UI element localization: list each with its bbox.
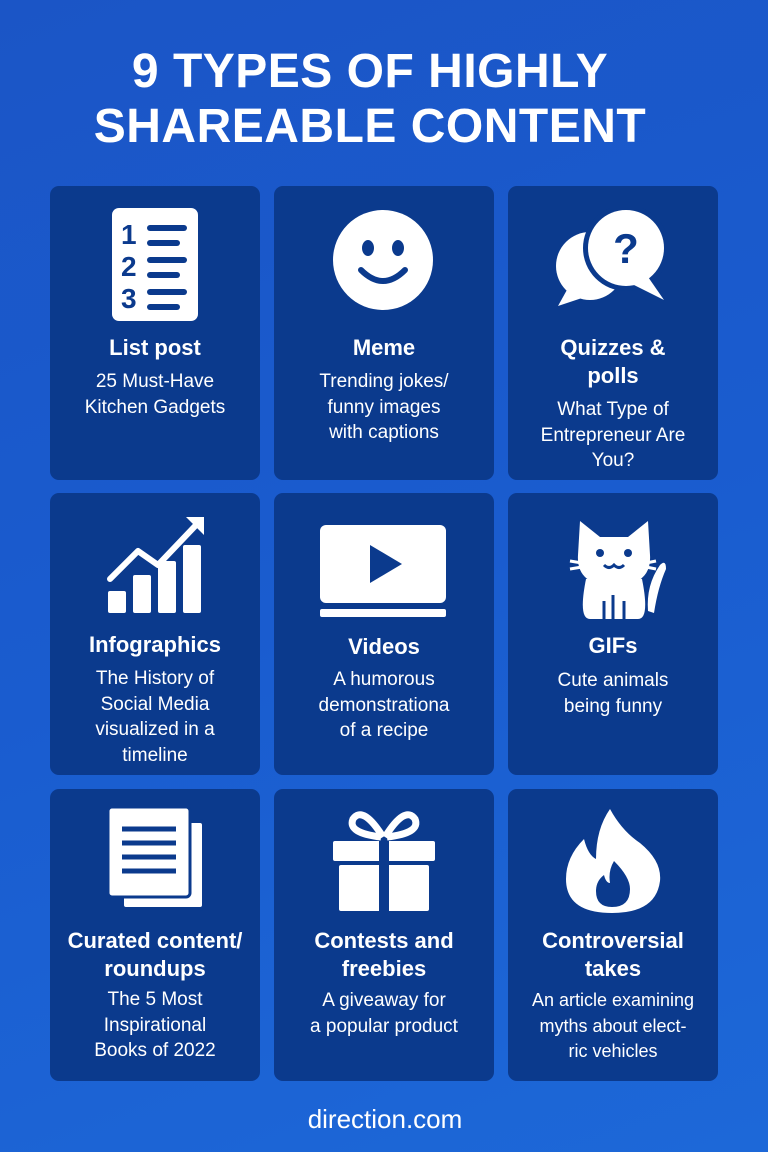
heading <box>68 928 242 981</box>
text: visualized in a <box>95 719 215 740</box>
text: An article examining <box>532 990 694 1010</box>
text: Trending jokes/ <box>319 371 449 392</box>
text: Entrepreneur Are <box>541 424 685 446</box>
text: myths about elect- <box>539 1016 687 1036</box>
icon: bar chart <box>107 517 204 613</box>
text <box>558 670 668 716</box>
footer: direction.com <box>308 1104 462 1134</box>
panel: infographics <box>50 493 260 775</box>
text: Social Media <box>101 694 209 714</box>
panel: curated <box>50 789 260 1081</box>
panel: videos <box>274 493 494 775</box>
text: Cute animals <box>558 670 668 691</box>
heading: Infographics <box>89 632 221 657</box>
heading: Contests and <box>314 928 454 953</box>
heading: roundups <box>104 956 206 981</box>
title <box>94 45 646 153</box>
heading <box>314 928 454 981</box>
icon: numbered list <box>112 208 198 321</box>
panel: contests <box>274 789 494 1081</box>
title: SHAREABLE CONTENT <box>94 100 646 153</box>
text <box>95 668 215 766</box>
icon: video player <box>320 525 446 617</box>
text <box>532 990 694 1061</box>
panel: quizzes <box>508 186 718 480</box>
text: A giveaway for <box>322 990 446 1011</box>
text: timeline <box>122 744 188 766</box>
text: The 5 Most <box>107 989 203 1010</box>
text <box>85 371 225 418</box>
text: being funny <box>564 696 662 716</box>
heading: Controversial <box>542 928 684 953</box>
text: demonstrationa <box>319 694 449 716</box>
heading: freebies <box>342 956 426 981</box>
text: 25 Must-Have <box>96 371 214 392</box>
text: A humorous <box>333 669 435 690</box>
icon: numbered list: 3 <box>121 283 137 314</box>
text: of a recipe <box>340 720 428 741</box>
heading: Meme <box>353 335 415 360</box>
text: a popular product <box>310 1016 458 1036</box>
panel: gifs <box>508 493 718 775</box>
heading: polls <box>587 363 639 388</box>
text: with captions <box>329 422 439 443</box>
text <box>310 990 458 1036</box>
text: The History of <box>96 668 214 689</box>
icon: numbered list: 1 <box>121 219 137 250</box>
text: ric vehicles <box>568 1041 658 1061</box>
panel: meme <box>274 186 494 480</box>
text: What Type of <box>557 399 669 420</box>
text: You? <box>592 450 634 471</box>
heading <box>560 335 666 388</box>
text <box>319 371 449 443</box>
text: Inspirational <box>104 1014 206 1036</box>
text: funny images <box>327 396 440 418</box>
icon: smiley <box>333 210 433 310</box>
panel: list post <box>50 186 260 480</box>
text: Books of 2022 <box>94 1040 216 1061</box>
text <box>541 399 685 471</box>
text: Kitchen Gadgets <box>85 396 225 418</box>
icon: speech bubbles: ? <box>613 225 639 272</box>
text <box>319 669 450 741</box>
heading <box>542 928 684 981</box>
panel: controversial <box>508 789 718 1081</box>
icon: flame <box>566 809 660 913</box>
heading: List post <box>109 335 201 360</box>
icon: documents <box>110 808 202 907</box>
icon: speech bubbles <box>556 210 664 306</box>
icon: cat <box>570 521 666 619</box>
heading: Quizzes & <box>560 335 666 360</box>
title: 9 TYPES OF HIGHLY <box>132 45 608 98</box>
text <box>94 989 216 1061</box>
heading: GIFs <box>589 633 637 658</box>
heading: takes <box>585 956 641 981</box>
heading: Videos <box>348 634 420 659</box>
icon: gift <box>333 811 435 911</box>
icon: numbered list: 2 <box>121 251 137 282</box>
heading: Curated content/ <box>68 928 242 953</box>
